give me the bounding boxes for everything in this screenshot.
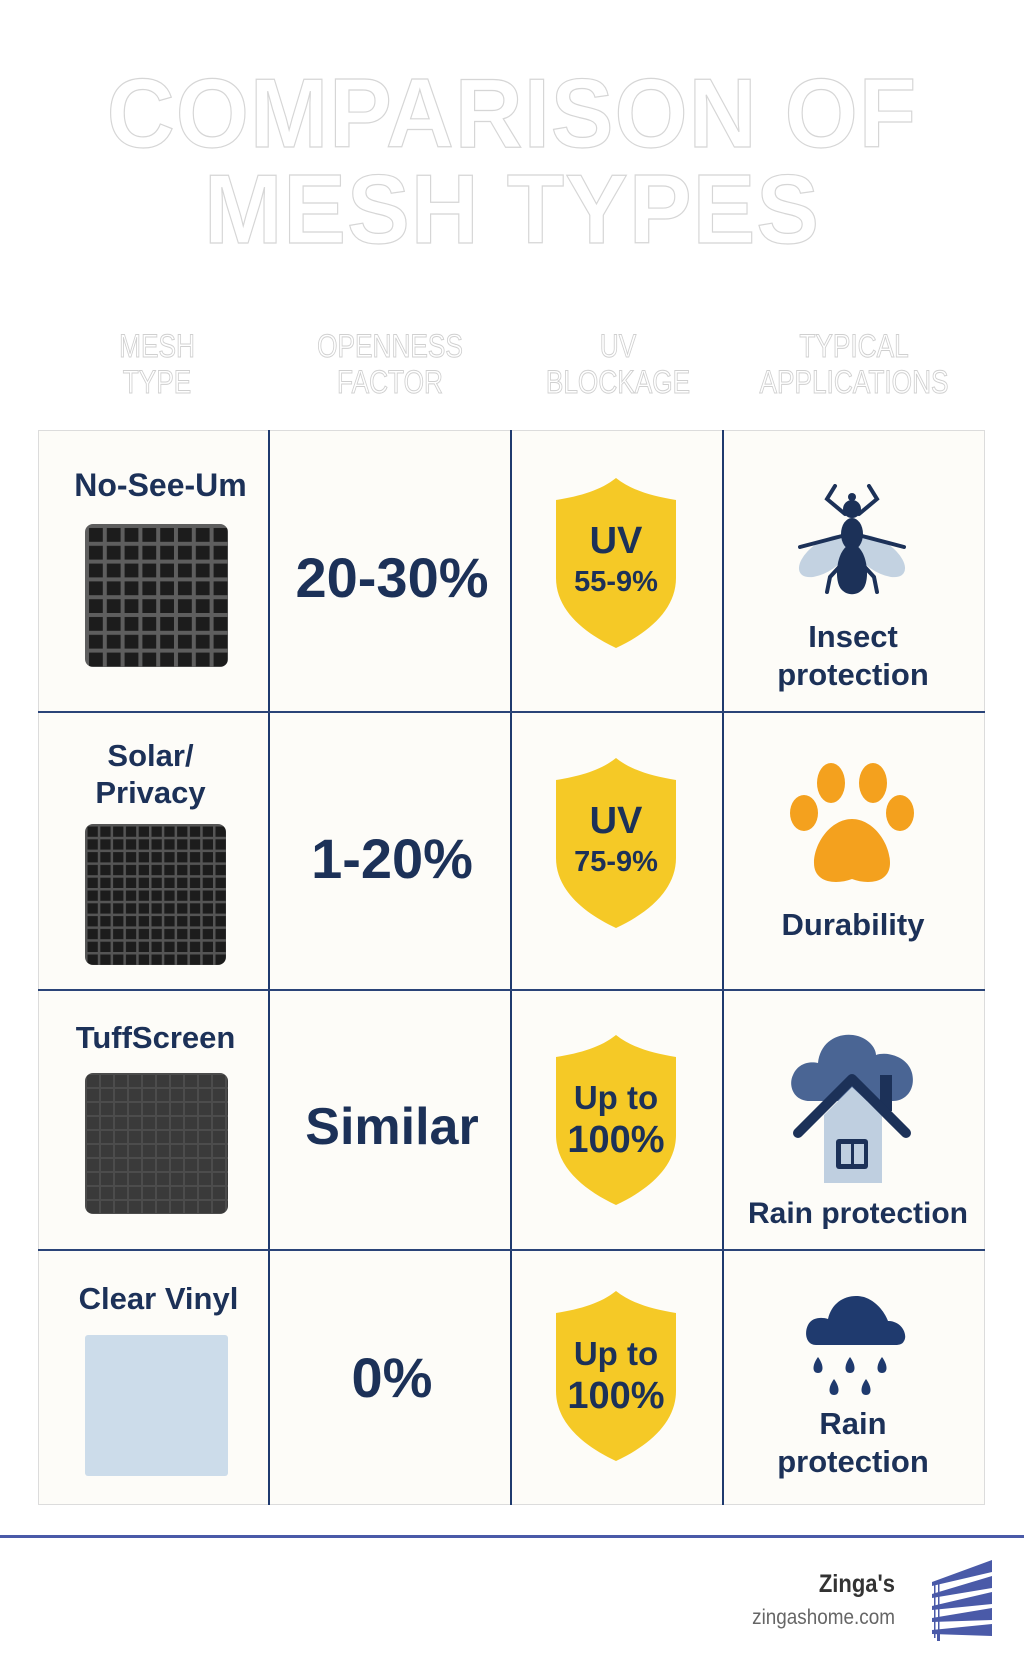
application label: Rain [819, 1406, 887, 1441]
title: MESH TYPES [204, 154, 820, 264]
shield: 100% [567, 1375, 665, 1417]
shield [556, 1291, 676, 1461]
column headers: TYPICAL [799, 328, 909, 364]
icon: insect [798, 484, 906, 594]
icon: house with cloud [791, 1034, 913, 1183]
openness value: Similar [305, 1098, 479, 1156]
footer brand: Zinga's [819, 1570, 895, 1598]
column headers: TYPE [123, 364, 191, 400]
mesh name: Solar/ [107, 738, 194, 773]
shield: Up to [574, 1335, 658, 1372]
shield: UV [590, 800, 642, 842]
icon: paw [790, 763, 914, 882]
column headers: OPENNESS [317, 328, 463, 364]
column headers: MESH [119, 328, 195, 364]
openness value: 1-20% [311, 827, 473, 890]
row 4: Clear Vinyl [79, 1281, 929, 1479]
logo: blinds [932, 1560, 992, 1641]
shield [556, 1035, 676, 1205]
title: COMPARISON OF [107, 58, 917, 168]
shield: 55-9% [574, 566, 658, 598]
application label: protection [777, 657, 929, 692]
swatch [85, 1073, 228, 1214]
application label: Insect [808, 619, 898, 654]
title [107, 58, 917, 264]
swatch [85, 824, 226, 965]
column headers: BLOCKAGE [546, 364, 690, 400]
openness value: 0% [352, 1346, 432, 1409]
icon: rain cloud [806, 1296, 906, 1395]
application label: Rain protection [748, 1197, 968, 1230]
mesh name [95, 738, 206, 810]
swatch [85, 1335, 228, 1476]
mesh name: Privacy [95, 775, 206, 810]
shield: Up to [574, 1079, 658, 1116]
application label [777, 619, 929, 692]
column headers [119, 328, 949, 400]
footer brand [752, 1570, 895, 1629]
shield [556, 478, 676, 648]
column headers: APPLICATIONS [759, 364, 949, 400]
shield [556, 758, 676, 928]
column headers: FACTOR [337, 364, 443, 400]
mesh name: Clear Vinyl [79, 1281, 238, 1316]
table [38, 430, 985, 1505]
footer brand: zingashome.com [752, 1606, 895, 1629]
mesh name: TuffScreen [76, 1020, 235, 1055]
shield: 100% [567, 1119, 665, 1161]
openness value: 20-30% [295, 546, 489, 609]
swatch [85, 524, 228, 667]
application label: protection [777, 1444, 929, 1479]
footer divider [0, 1535, 1024, 1538]
row 2: Solar/Privacy [85, 738, 924, 965]
shield: UV [590, 520, 642, 562]
mesh name: No-See-Um [74, 467, 247, 503]
shield: 75-9% [574, 846, 658, 878]
row 3: TuffScreen [76, 1020, 968, 1230]
column headers: UV [600, 328, 636, 364]
application label [777, 1406, 929, 1479]
application label: Durability [782, 907, 924, 942]
row 1: No-See-Um [74, 467, 929, 692]
